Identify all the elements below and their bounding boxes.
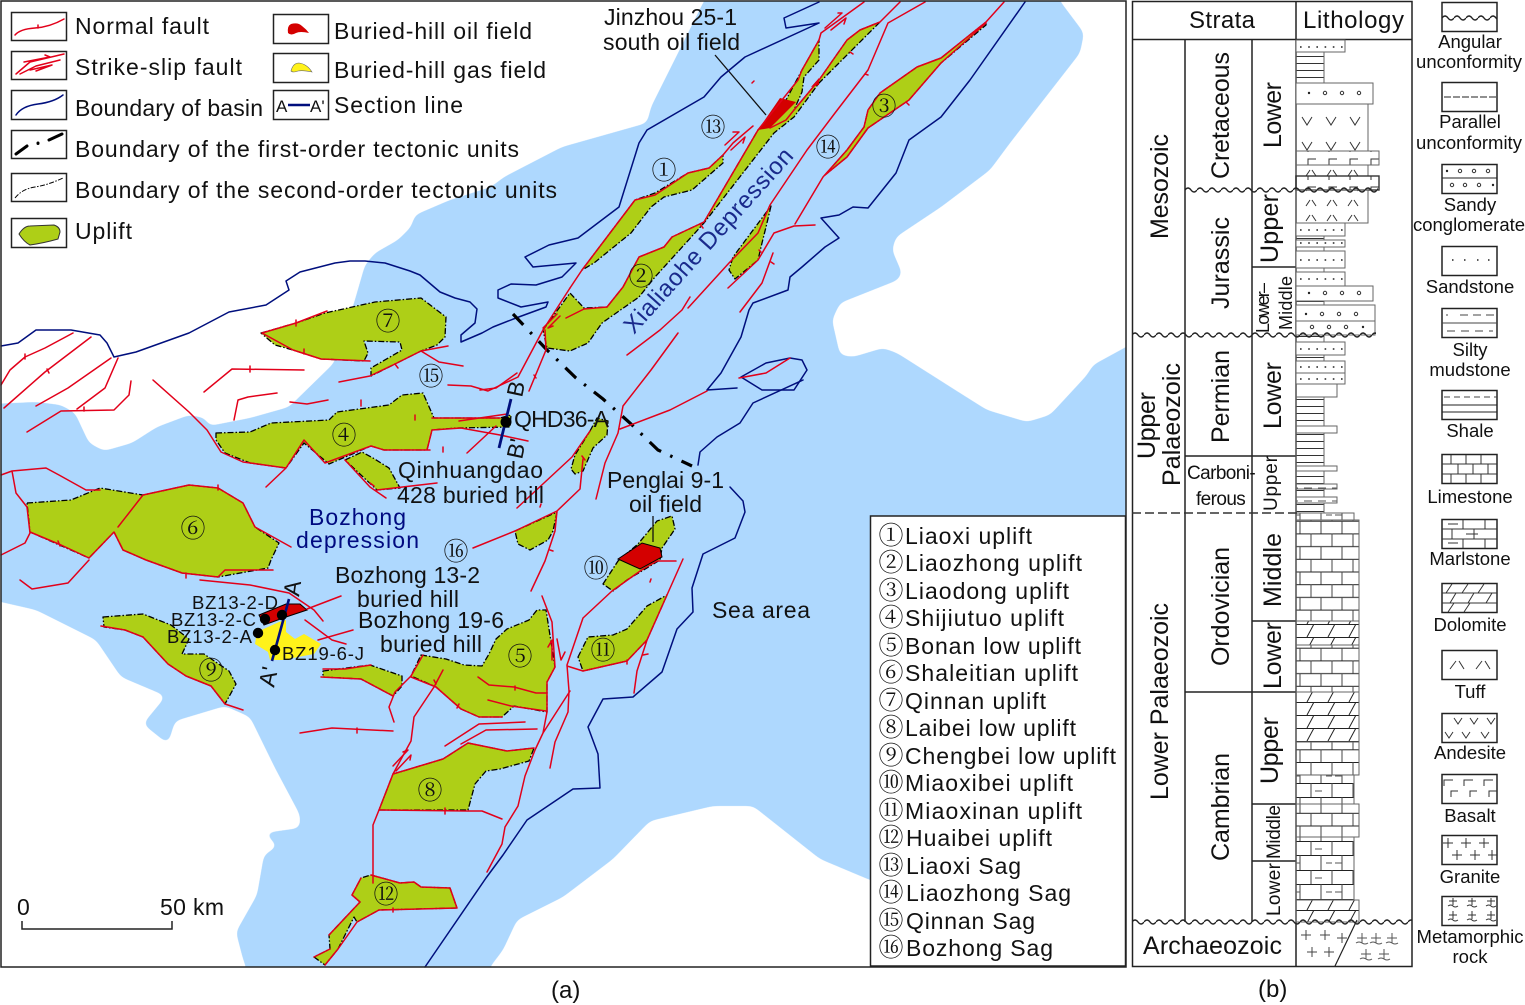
key: limestone: Limestone [1427, 486, 1513, 507]
map labels: buried hill [357, 586, 459, 612]
strata labels: Upper [1261, 455, 1282, 511]
key: uplift [12, 218, 133, 248]
key: andesite: Andesite [1434, 742, 1506, 763]
strata labels: Middle [1276, 276, 1296, 330]
strata labels [1133, 7, 1404, 960]
uplift and sag name list: ⑤ [878, 626, 904, 662]
strata labels: Ordovician [1207, 547, 1235, 666]
uplift and sag name list: ⑫ [878, 818, 904, 854]
key: basalt [1442, 774, 1497, 826]
uplift 1 [582, 155, 723, 270]
circled numbers on map: ⑥ [180, 509, 206, 545]
strata labels: Upper [1133, 392, 1161, 459]
map labels: 0 [17, 894, 30, 920]
uplift and sag name list: ⑧ [878, 708, 904, 744]
circled numbers on map: ⑦ [375, 302, 401, 338]
key: parallel unconformity: unconformity [1416, 132, 1523, 153]
key: metamorphic rock [1417, 896, 1523, 967]
map labels: BZ13-2-C [171, 609, 256, 630]
key: sandstone: Sandstone [1426, 276, 1514, 297]
uplift and sag name list: Liaozhong uplift [905, 550, 1083, 576]
key: granite [1440, 836, 1500, 887]
map labels: south oil field [603, 29, 740, 55]
circled numbers on map: ⑮ [418, 357, 444, 393]
uplift and sag name list: ⑨ [878, 736, 904, 772]
uplift and sag name list: Bonan low uplift [905, 633, 1082, 659]
uplift 5 [411, 610, 555, 717]
map key: top left [12, 12, 557, 248]
strata labels: Upper [1256, 194, 1284, 263]
map labels: oil field [629, 491, 702, 517]
map labels: Qinhuangdao [398, 457, 543, 483]
circled numbers on map [180, 87, 897, 911]
key: first-order boundary: Boundary of the first-order tectonic units [75, 136, 519, 162]
land: upper left [0, 0, 724, 451]
uplift and sag name list: Liaoxi Sag [906, 853, 1021, 879]
map labels: BZ13-2-A [167, 626, 253, 647]
key: metamorphic rock: rock [1453, 946, 1488, 967]
strata labels: Archaeozoic [1143, 932, 1282, 960]
uplift 10 [603, 516, 675, 591]
uplift 3 [825, 22, 986, 175]
key: silty mudstone: mudstone [1429, 359, 1511, 380]
circled numbers on map: ④ [331, 416, 357, 452]
key: parallel unconformity: Parallel [1439, 111, 1501, 132]
key: boundary of basin: Boundary of basin [75, 95, 263, 121]
uplift and sag name list: Miaoxibei uplift [905, 770, 1074, 796]
key: normal fault [12, 12, 210, 40]
key: marlstone [1429, 520, 1511, 569]
oil field: Penglai 9-1 [618, 543, 662, 569]
fault ticks [25, 52, 909, 912]
uplift and sag name list: Chengbei low uplift [905, 743, 1117, 769]
uplift and sag name list: ⑩ [878, 763, 904, 799]
strata labels: Lower [1264, 862, 1285, 916]
key: strike-slip fault [12, 52, 243, 80]
strata labels: Lower [1259, 362, 1287, 429]
uplift and sag name list: Qinnan Sag [906, 908, 1035, 934]
uplift 8 [379, 743, 534, 810]
map labels: 50 km [160, 894, 224, 920]
key: parallel unconformity [1416, 82, 1523, 153]
lithology column [1296, 40, 1398, 966]
circled numbers on map: ⑤ [507, 637, 533, 673]
map labels: A [278, 578, 306, 598]
strata labels: Palaeozoic [1158, 363, 1186, 486]
strata labels: Jurassic [1207, 217, 1235, 309]
uplift and sag name list: ⑦ [878, 681, 904, 717]
key: metamorphic rock: Metamorphic [1417, 926, 1523, 947]
key: angular unconformity: unconformity [1416, 51, 1523, 72]
uplift and sag name list: Shijiutuo uplift [905, 605, 1065, 631]
map labels: Bozhong 13-2 [335, 562, 480, 588]
oil field: Bozhong 13-2 [259, 604, 307, 625]
map frame [1, 1, 1126, 967]
land: south [480, 806, 900, 1005]
uplift 2 and long strip [543, 22, 880, 351]
uplift and sag name list: Qinnan uplift [905, 688, 1047, 714]
uplift south of Qinhuangdao [515, 512, 557, 550]
strata labels: Lower– [1253, 283, 1273, 333]
uplift between depressions [729, 206, 771, 279]
uplift near QHD36-A [571, 418, 608, 474]
map labels: B' [501, 436, 531, 461]
circled numbers on map: ⑧ [417, 771, 443, 807]
uplift and sag name list: Liaozhong Sag [906, 880, 1071, 906]
uplift and sag name list: ⑬ [878, 846, 904, 882]
map labels: Sea area [712, 597, 810, 623]
strata labels: Lower [1259, 622, 1287, 689]
panel (a): geological map [0, 0, 1170, 1005]
oil field: Jinzhou 25-1 south [758, 98, 796, 130]
scale bar [22, 921, 172, 929]
first-order tectonic boundary [513, 314, 692, 466]
uplift 4 lobe [345, 452, 400, 490]
key: angular unconformity [1416, 2, 1523, 72]
land areas [0, 0, 1170, 1005]
key: basalt: Basalt [1444, 805, 1496, 826]
lithology key [1413, 2, 1525, 967]
strata labels: Middle [1259, 533, 1287, 607]
key: oil field [274, 14, 532, 44]
strata labels: Permian [1207, 350, 1235, 443]
key: shale [1442, 390, 1497, 441]
map labels: Bozhong 19-6 [358, 607, 504, 633]
uplift 9 [103, 614, 236, 704]
key: boundary of basin [12, 90, 263, 121]
map labels: depression [296, 527, 419, 553]
circled numbers on map: ⑯ [443, 532, 469, 568]
circled numbers on map: ⑫ [373, 875, 399, 911]
strata labels: Strata [1189, 7, 1256, 34]
key: oil field: Buried-hill oil field [334, 18, 532, 44]
strata labels: Lithology [1303, 7, 1404, 34]
key: dolomite: Dolomite [1434, 614, 1506, 635]
uplift and sag name list: ⑮ [878, 901, 904, 937]
map labels: BZ19-6-J [282, 643, 364, 664]
key: angular unconformity: Angular [1438, 31, 1502, 52]
circled numbers on map: ⑪ [590, 631, 616, 667]
map labels: Xialiaohe Depression [618, 143, 799, 339]
key: marlstone: Marlstone [1429, 548, 1511, 569]
key: second-order boundary: Boundary of the second-order tectonic units [75, 177, 557, 203]
uplift and sag name list: ⑭ [878, 873, 904, 909]
table grid [1132, 2, 1412, 966]
caption (b): (b) [1258, 976, 1287, 1003]
uplift and sag name list: ⑥ [878, 653, 904, 689]
uplift and sag name list: Bozhong Sag [906, 935, 1053, 961]
small oil field north [811, 78, 819, 87]
strike-slip arrows [393, 13, 846, 771]
uplift 12 [314, 875, 457, 965]
key: normal fault: Normal fault [75, 13, 210, 39]
key: granite: Granite [1440, 866, 1500, 887]
uplift and sag name list: Shaleitian uplift [905, 660, 1079, 686]
land: south west [0, 595, 300, 1005]
circled numbers on map: ③ [871, 87, 897, 123]
key: section line: A [276, 97, 288, 116]
circled numbers on map: ② [628, 257, 654, 293]
key: section line [274, 90, 463, 120]
strata labels: Middle [1264, 805, 1285, 859]
uplift 7 [261, 298, 446, 376]
key: gas field [274, 54, 546, 83]
uplift and sag name list: Liaoxi uplift [905, 523, 1033, 549]
land: right [832, 0, 1170, 422]
wells [253, 416, 512, 655]
key: gas field: Buried-hill gas field [334, 57, 546, 83]
uplift 4 [216, 393, 511, 468]
map labels [17, 4, 810, 920]
map labels: 428 buried hill [397, 482, 544, 508]
uplift 6 [27, 485, 279, 577]
map labels: A' [253, 664, 283, 689]
uplift and sag name list [870, 516, 1126, 966]
uplift and sag name list: ③ [878, 571, 904, 607]
map labels: Bozhong [309, 504, 406, 530]
uplift near Bozhong 19-6 [323, 665, 402, 696]
strata labels: Carboni- [1187, 463, 1255, 484]
key: dolomite [1434, 584, 1506, 635]
key: sandy conglomerate [1413, 164, 1525, 235]
map labels: BZ13-2-D [192, 592, 278, 613]
circled numbers on map: ⑭ [815, 128, 841, 164]
faults [1, 2, 1004, 965]
uplift and sag name list: ② [878, 543, 904, 579]
key: strike-slip fault: Strike-slip fault [75, 54, 243, 80]
key: sandstone [1426, 246, 1514, 297]
map labels: buried hill [380, 631, 482, 657]
key: sandy conglomerate: conglomerate [1413, 214, 1525, 235]
unconformity lines [1132, 186, 1412, 926]
uplift and sag name list: ① [878, 516, 904, 552]
key: andesite [1434, 714, 1506, 763]
uplift and sag name list: Miaoxinan uplift [905, 798, 1083, 824]
section line B-B' [499, 399, 511, 448]
leader lines [653, 55, 766, 542]
map labels: QHD36-A [514, 406, 610, 432]
key: tuff [1442, 650, 1497, 702]
key: limestone [1427, 454, 1513, 507]
uplift and sag name list: ⑪ [878, 791, 904, 827]
circled numbers on map: ① [651, 151, 677, 187]
key: section line: Section line [334, 92, 463, 118]
gas field: Bozhong 19-6 [255, 620, 321, 660]
circled numbers on map: ⑨ [198, 651, 224, 687]
strata labels: ferous [1196, 489, 1245, 510]
strata labels: Cretaceous [1207, 52, 1235, 179]
sea area background [1, 1, 1126, 967]
map labels: Penglai 9-1 [607, 467, 724, 493]
key: uplift: Uplift [75, 218, 133, 244]
key: silty mudstone [1429, 308, 1511, 380]
key: sandy conglomerate: Sandy [1444, 194, 1497, 215]
strata labels: Mesozoic [1146, 134, 1174, 239]
uplift and sag name list: Laibei low uplift [905, 715, 1077, 741]
uplift and sag name list: Huaibei uplift [906, 825, 1053, 851]
uplift and sag name list: ⑯ [878, 928, 904, 964]
uplift and sag name list: Liaodong uplift [905, 578, 1070, 604]
circled numbers on map: ⑬ [700, 108, 726, 144]
strata labels: Cambrian [1207, 753, 1235, 861]
strata labels: Lower Palaeozoic [1146, 603, 1174, 800]
key: shale: Shale [1446, 420, 1494, 441]
uplift and sag name list: ④ [878, 598, 904, 634]
map labels: Jinzhou 25-1 [604, 4, 737, 30]
map labels: B [501, 379, 530, 399]
uplift 11 [578, 595, 667, 671]
circled numbers on map: ⑩ [583, 549, 609, 585]
basin boundary lines [1, 2, 1025, 967]
panel (b): stratigraphic column [1132, 2, 1412, 966]
key: tuff: Tuff [1455, 681, 1486, 702]
strata labels: Upper [1256, 717, 1284, 784]
key: section line: A' [310, 97, 325, 116]
strata labels: Lower [1259, 82, 1287, 148]
section line A-A' [272, 599, 289, 661]
caption (a): (a) [551, 977, 580, 1004]
key: silty mudstone: Silty [1453, 339, 1488, 360]
